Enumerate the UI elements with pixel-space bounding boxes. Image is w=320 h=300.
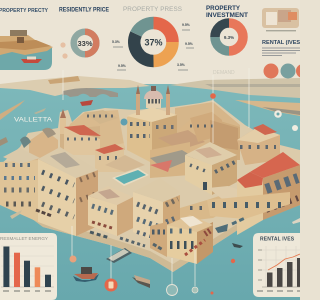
far shore: left	[0, 76, 150, 146]
label: Valletta: VALLETTA	[14, 116, 53, 124]
building: west mid	[20, 128, 58, 165]
callout sublines	[113, 30, 194, 70]
chart callouts: 5.3%	[112, 40, 120, 44]
heading: property investment: INVESTMENT	[206, 13, 248, 19]
small decorative dots	[60, 42, 68, 59]
bars	[3, 246, 51, 287]
boat: north	[80, 100, 93, 106]
connector lines	[63, 68, 249, 286]
blue small dome	[120, 118, 128, 126]
background blocks	[60, 110, 125, 150]
mid clutter roofs	[105, 155, 145, 172]
faint label: demand: DEMAND	[213, 70, 235, 76]
heading: residently price: RESIDENTLY PRICE	[59, 8, 109, 14]
boat: south	[132, 277, 150, 288]
building: south-east large	[133, 178, 180, 245]
building: west large	[38, 147, 98, 236]
boat: left pier	[10, 210, 22, 219]
chart title: RESMALLET ENERGY	[0, 236, 48, 241]
heading: property press: PROPERTY PRESS	[123, 6, 182, 13]
building: south-east row	[207, 192, 290, 219]
building: east red roof top	[237, 124, 280, 165]
top-right interior picture	[262, 8, 299, 31]
far shore: right	[170, 78, 300, 116]
boat: east	[232, 243, 243, 248]
boat: pale skiff	[34, 108, 46, 114]
small donut chart: 33%: 33%	[77, 39, 93, 48]
boats	[10, 100, 300, 288]
parked cars and trees	[215, 224, 228, 233]
building: centre-right	[185, 142, 237, 195]
building: red-roof corner	[237, 152, 300, 235]
panel: bottom-right rental chart	[253, 233, 302, 297]
city land mass	[0, 100, 300, 272]
promenade shoreline	[7, 195, 300, 272]
chart callouts: 3.5%	[177, 63, 185, 67]
building: small red roof	[95, 143, 124, 172]
bars	[267, 258, 302, 287]
city buildings	[0, 85, 300, 264]
building: north-west with red roof	[60, 109, 101, 155]
building: bottom centre-right	[167, 215, 213, 264]
map marker dots	[70, 93, 298, 296]
axis labels	[3, 290, 51, 292]
swimming pool	[112, 168, 149, 186]
trend line	[268, 254, 300, 270]
axis	[262, 286, 300, 288]
large donut chart: 37%: 37%	[144, 38, 163, 48]
panel: bottom-left bar chart	[0, 233, 57, 300]
cathedral	[127, 85, 177, 162]
heading: property investment	[206, 6, 248, 19]
large donut chart: 37%	[134, 23, 172, 61]
chart callouts: 9.5%	[185, 42, 193, 46]
chart callouts: 9.5%	[182, 23, 190, 27]
rental body text lines	[262, 48, 300, 56]
medium donut chart: 9.3%	[215, 23, 243, 51]
pier	[106, 248, 132, 263]
building: bottom-left of centre-right	[150, 222, 167, 257]
harbour sea	[0, 84, 300, 300]
heading: property investment: PROPERTY	[206, 6, 240, 12]
boat	[21, 59, 42, 63]
panel: top-left harbour picture	[0, 30, 53, 70]
chart callouts	[112, 23, 193, 68]
boat: south-west	[73, 274, 99, 282]
medium donut chart: 9.3%: 9.3%	[224, 35, 234, 40]
chart title: RENTAL IVES	[260, 236, 295, 242]
building: south centre	[88, 186, 133, 236]
small donut chart: 33%	[74, 32, 96, 54]
chart callouts: 9.5%	[118, 64, 126, 68]
building: far left front	[0, 148, 40, 222]
heading: property pretty: PROPERTY PRECTY	[0, 8, 48, 14]
building: lower centre-right	[180, 186, 247, 222]
rental circles	[264, 64, 310, 78]
